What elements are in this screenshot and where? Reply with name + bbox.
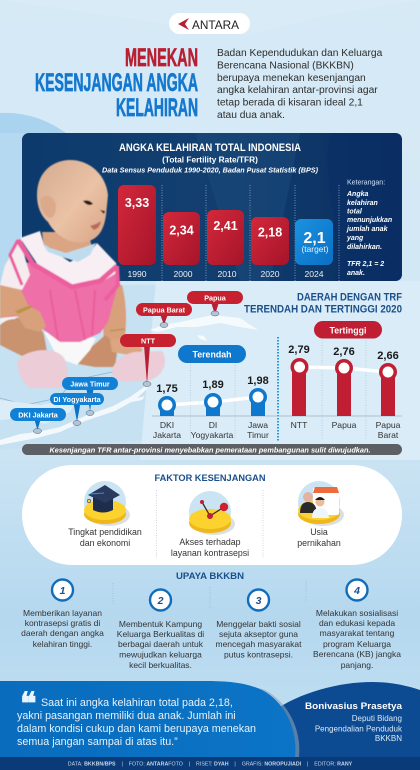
bar: Papua: [332, 346, 357, 430]
bar 2020: 2020: [260, 269, 280, 279]
bar 1990: 3,33: [125, 196, 149, 210]
step 2: Keluarga Berkualitas di: [117, 629, 204, 639]
panel: speaker: Pengendalian Penduduk: [315, 724, 403, 734]
factor text 3: Usia: [310, 527, 328, 537]
icon: network nodes: [189, 491, 235, 535]
pill: Terendah: [178, 345, 246, 363]
quote text: [17, 697, 256, 748]
bar 2020: 2,18: [258, 226, 282, 240]
title: MENEKAN: [125, 44, 198, 72]
map pin: Papua: Papua: [204, 294, 227, 302]
title: KESENJANGAN ANGKA: [35, 69, 198, 97]
panel: Faktor Kesenjangan: [22, 465, 402, 565]
bar: Jawa Timur: Timur: [247, 430, 269, 440]
bar 2024 target: 2024: [304, 269, 324, 279]
heading: lowest and highest: TERENDAH DAN TERTINGGI 2020: [244, 304, 402, 316]
intro text: Badan Kependudukan dan Keluarga: [217, 48, 383, 59]
panel: quote: [0, 681, 299, 757]
step 4: 4: [353, 585, 360, 597]
step 3: mencegah masyarakat: [216, 639, 302, 649]
bar 2024 target: [295, 219, 333, 279]
step 3: [216, 590, 302, 660]
factor text 3: pernikahan: [297, 538, 341, 548]
bar: NTT: [288, 344, 310, 430]
factor text 2: Akses terhadap: [179, 537, 241, 547]
legend note: [346, 180, 392, 277]
legend note: Angka: [346, 191, 368, 198]
intro text: tetap berada di kisaran ideal 2,1: [217, 98, 363, 108]
icon: couple and calendar: [298, 481, 344, 526]
step 2: [117, 590, 204, 670]
step 1: [21, 580, 104, 649]
panel: speaker: [272, 682, 420, 770]
map pin: DI Yogyakarta: DI Yogyakarta: [53, 395, 102, 404]
bar: DI Yogyakarta: 1,89: [202, 379, 224, 391]
step 4: panjang.: [341, 660, 373, 670]
footer credits: [0, 757, 420, 770]
socks: [18, 350, 67, 388]
head: [37, 160, 108, 243]
bar: NTT: 2,79: [288, 344, 310, 356]
map pin: Jawa Timur: Jawa Timur: [70, 380, 110, 388]
legend note: TFR 2,1 = 2: [347, 261, 384, 268]
intro text: Berencana Nasional (BKKBN): [217, 60, 354, 72]
map pin: NTT: [120, 334, 176, 386]
caption strip: [22, 444, 402, 455]
step 2: Membentuk Kampung: [119, 619, 202, 629]
factor text 1: dan ekonomi: [80, 538, 130, 548]
mouth: [90, 221, 101, 230]
map pin: Jawa Timur: [62, 377, 118, 416]
map of Indonesia: [0, 315, 258, 445]
sleeve: [0, 240, 30, 290]
bar: DKI Jakarta: 1,75: [156, 383, 178, 395]
step 3: putus kontrasepsi.: [224, 650, 293, 660]
ruffle: [18, 240, 117, 287]
step 3: Menggelar bakti sosial: [216, 619, 301, 629]
icon: graduation cap: [84, 481, 130, 526]
logo: Antara: [169, 13, 250, 34]
map pin: DI Yogyakarta: [50, 393, 104, 426]
bar 2024 target: 2,1: [303, 230, 326, 247]
step 1: kontrasepsi gratis di: [25, 618, 100, 628]
bar: Papua Barat: Papua: [376, 420, 401, 430]
left thigh: [0, 318, 47, 356]
step 4: dan edukasi kepada: [319, 618, 395, 628]
quote text: Saat ini angka kelahiran total pada 2,18,: [41, 697, 233, 709]
bar: Papua Barat: 2,66: [377, 350, 399, 362]
step 2: mewujudkan keluarga: [119, 650, 202, 660]
legend note: dilahirkan.: [347, 244, 382, 251]
heading: FAKTOR KESENJANGAN: [154, 473, 266, 484]
factor text 2: [171, 537, 249, 558]
legend note: anak.: [347, 270, 365, 277]
step 4: masyarakat tentang: [320, 628, 395, 638]
step 1: Memberikan layanan: [23, 608, 102, 618]
bar: Papua Barat: Barat: [378, 430, 399, 440]
title: [35, 44, 198, 122]
bar 1990: [118, 185, 156, 279]
neck: [42, 232, 92, 256]
panel: speaker: Bonivasius Prasetya: [305, 700, 403, 711]
bar: Jawa Timur: Jawa: [248, 420, 268, 430]
pill: Tertinggi: [314, 321, 382, 338]
dress: [0, 262, 118, 342]
map pin: Papua: [187, 291, 243, 316]
bar 2010: 2010: [217, 269, 237, 279]
step 1: 1: [60, 585, 66, 597]
hand on foot: [110, 338, 143, 356]
chart title: Data Sensus Penduduk 1990-2020, Badan Pusat Statistik (BPS): [102, 168, 319, 174]
intro text: atau dua anak.: [217, 110, 285, 121]
step 4: Melakukan sosialisasi: [316, 608, 398, 618]
collar: [20, 231, 118, 287]
bar: DKI Jakarta: DKI: [160, 420, 174, 430]
bar: Papua Barat: [376, 350, 401, 440]
factor text 2: layanan kontrasepsi: [171, 548, 249, 558]
quote text: dalam kondisi cukup dan kami berupaya menekan: [17, 723, 256, 735]
chart title: [102, 142, 319, 174]
eyes: [83, 200, 93, 205]
step 2: kecil berkualitas.: [129, 660, 192, 670]
quote text: semua jangan sampai di atas itu.”: [17, 736, 178, 748]
quote text: yakni pasangan memiliki dua anak. Jumlah ini: [17, 710, 236, 722]
bar: DI Yogyakarta: DI: [209, 420, 217, 430]
factor text 1: [68, 527, 142, 548]
bar: NTT: NTT: [291, 420, 308, 430]
bar 2010: 2,41: [213, 219, 238, 233]
step 2: berbagai daerah untuk: [118, 639, 204, 649]
step 2: 2: [157, 595, 164, 607]
bar: Jawa Timur: 1,98: [247, 375, 269, 387]
map pin: DKI Jakarta: DKI Jakarta: [18, 410, 59, 420]
step 3: 3: [256, 595, 262, 607]
bar 2000: 2000: [173, 269, 193, 279]
diaper: [44, 332, 96, 365]
caption strip: Kesenjangan TFR antar-provinsi menyebabkan pemerataan pembangunan sulit diwujudkan.: [50, 448, 371, 454]
bar 2000: 2,34: [169, 224, 194, 238]
bar: DKI Jakarta: [153, 383, 181, 440]
footer credits: DATA: BKKBN/BPS | FOTO: ANTARAFOTO | RISET: DYAH | GRAFIS: NOROPUJIADI | EDITOR: RANY: [68, 762, 353, 768]
legend note: jumlah anak: [346, 226, 389, 233]
bar: DKI Jakarta: Jakarta: [153, 430, 181, 440]
photo: baby: [0, 160, 165, 388]
step 4: program Keluarga: [323, 639, 391, 649]
logo: Antara: ANTARA: [192, 20, 239, 32]
bib: [42, 243, 96, 262]
bar 1990: 1990: [127, 269, 147, 279]
chart: lowest and highest TFR: [152, 321, 402, 442]
heading: lowest and highest: DAERAH DENGAN TRF: [297, 292, 402, 304]
intro text: berupaya menekan kesenjangan: [217, 73, 366, 84]
map pin: DKI Jakarta: [10, 408, 66, 434]
legend note: menunjukkan: [347, 217, 392, 224]
bar: DI Yogyakarta: Yogyakarta: [191, 430, 234, 440]
right thigh: [73, 335, 118, 367]
heading: lowest and highest: [244, 292, 402, 316]
bar 2020: [251, 217, 289, 279]
pill: Tertinggi: Tertinggi: [330, 326, 366, 336]
chart title: (Total Fertility Rate/TFR): [162, 154, 258, 164]
map pin: Papua Barat: [136, 303, 192, 328]
left arm: [0, 284, 46, 332]
map pin: Papua Barat: Papua Barat: [143, 306, 186, 314]
legend note: Keterangan:: [347, 180, 385, 186]
factor text 1: Tingkat pendidikan: [68, 527, 142, 537]
chart title: ANGKA KELAHIRAN TOTAL INDONESIA: [119, 142, 301, 154]
legend note: total: [347, 208, 363, 216]
map pin: NTT: NTT: [141, 336, 156, 346]
panel: speaker: Deputi Bidang: [352, 714, 402, 723]
right arm: [100, 285, 126, 345]
bar 2024 target: (target): [302, 244, 329, 254]
bar: Jawa Timur: [247, 375, 269, 440]
pill: Terendah: Terendah: [193, 350, 231, 360]
step 4: [313, 580, 401, 670]
step 1: kelahiran tinggi.: [33, 639, 92, 649]
bar: Papua: 2,76: [333, 346, 355, 358]
bar 2010: [207, 210, 244, 279]
bar: Papua: Papua: [332, 420, 357, 430]
legend note: yang: [346, 235, 364, 242]
bar 2000: [163, 212, 200, 279]
factor text 3: [297, 527, 341, 548]
step 1: daerah dengan angka: [21, 628, 104, 638]
intro text: angka kelahiran antar-provinsi agar: [217, 85, 378, 96]
intro text: [217, 48, 383, 121]
panel: TFR chart: [22, 133, 402, 281]
step 3: sejuta akseptor guna: [219, 629, 298, 639]
quote mark: ❝: [20, 686, 37, 721]
panel: speaker: BKKBN: [375, 734, 402, 743]
legend note: kelahiran: [347, 200, 378, 207]
step 4: Berencana (KB) jangka: [313, 649, 401, 659]
heading: Upaya BKKBN: UPAYA BKKBN: [176, 571, 244, 582]
ear: [40, 196, 56, 218]
bar: DI Yogyakarta: [191, 379, 234, 440]
title: KELAHIRAN: [116, 94, 198, 122]
